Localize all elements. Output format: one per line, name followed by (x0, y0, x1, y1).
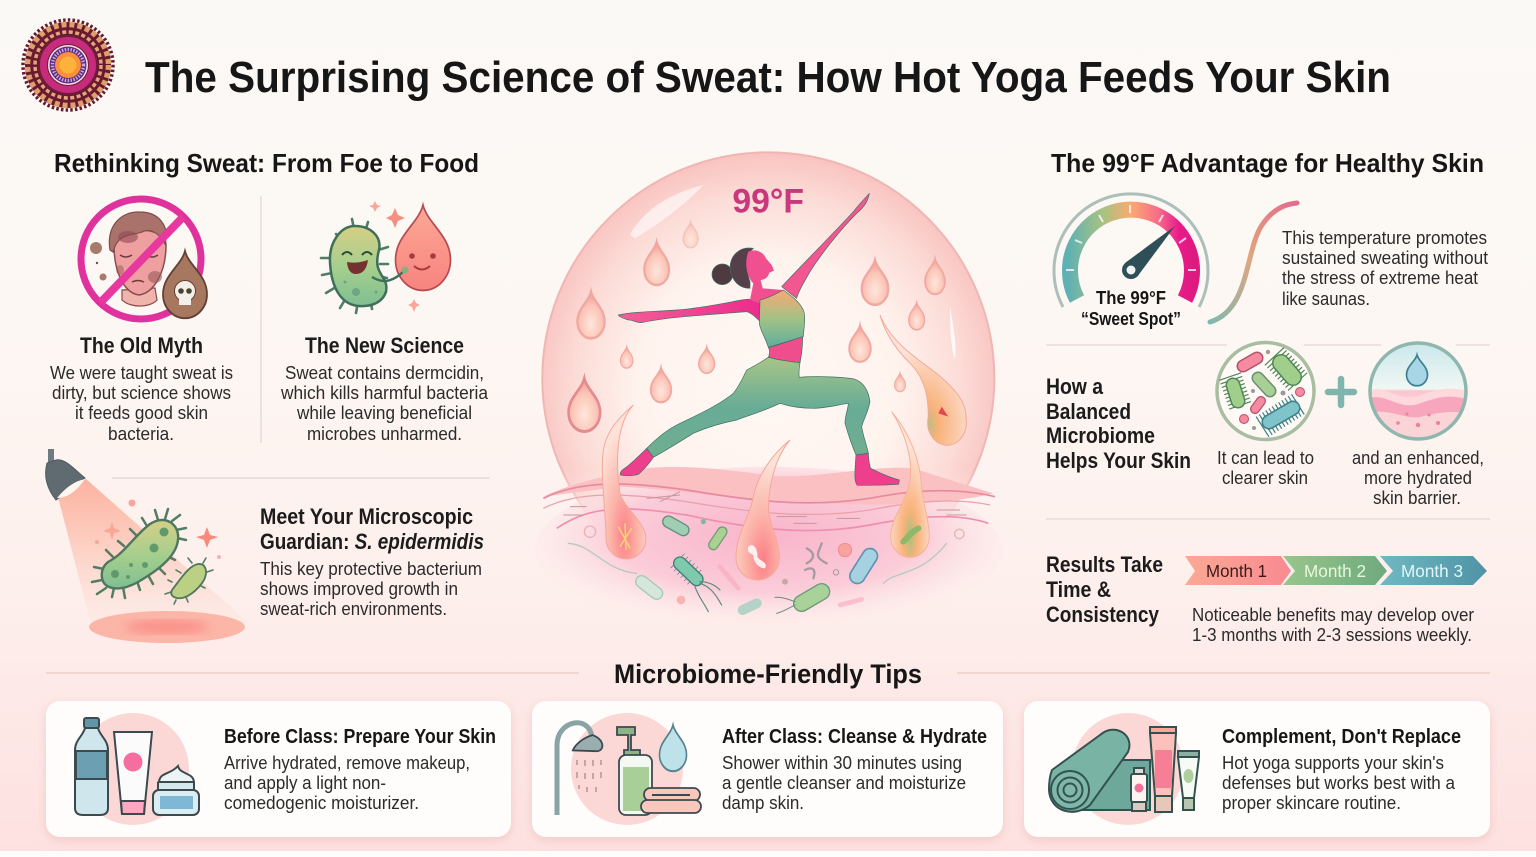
icon: new science, happy bacterium and sweat drop (321, 201, 450, 313)
heading: rethinking sweat: Rethinking Sweat: From Foe to Food (54, 148, 479, 178)
text: complement: Complement, Don't Replace (1222, 725, 1461, 748)
heading: results: Results Take (1046, 552, 1163, 577)
title: The Surprising Science of Sweat: How Hot Yoga Feeds Your Skin (145, 53, 1391, 102)
icon: skin barrier circle (1370, 343, 1468, 445)
text: meet your microscopic guardian: This key protective bacterium (260, 559, 482, 579)
text: the new science: microbes unharmed. (307, 424, 462, 444)
text: complement (1222, 725, 1461, 813)
text: before class (224, 725, 496, 813)
text: temperature: This temperature promotes (1282, 228, 1487, 248)
text: after class (722, 725, 987, 813)
text: meet your microscopic guardian: shows improved growth in (260, 579, 458, 599)
text: the old myth: We were taught sweat is (50, 363, 233, 383)
gauge: The 99°F (1096, 288, 1166, 308)
text: after class: Shower within 30 minutes using (722, 753, 962, 773)
text: results: Noticeable benefits may develop over (1192, 605, 1474, 625)
timeline chevrons: Month 2 (1304, 561, 1366, 581)
text: temperature: like saunas. (1282, 289, 1370, 309)
heading: results: Consistency (1046, 602, 1159, 627)
connector curve (1210, 203, 1297, 322)
front arm (618, 299, 766, 327)
skin layers with microbes (535, 467, 1002, 633)
text: before class: and apply a light non- (224, 773, 386, 793)
icon: shower, pump bottle, drop and towel (557, 723, 701, 815)
sweat drops (568, 222, 945, 432)
text: the old myth: The Old Myth (80, 333, 203, 358)
heading: balanced microbiome: Helps Your Skin (1046, 448, 1191, 473)
icon: bottle, tube and jar (75, 718, 199, 815)
timeline chevrons: Month 1 (1206, 561, 1267, 581)
gauge (1054, 194, 1208, 329)
card: after class (532, 701, 1003, 837)
text: the new science: which kills harmful bacteria (280, 383, 489, 403)
timeline chevrons (1185, 556, 1487, 585)
text: the old myth: bacteria. (108, 424, 174, 444)
text: the old myth (50, 333, 233, 444)
icon: yoga mat and skincare (1049, 727, 1199, 812)
text: meet your microscopic guardian: Meet Your Microscopic (260, 504, 473, 529)
caption: clearer skin: clearer skin (1222, 468, 1308, 488)
heading: balanced microbiome (1046, 374, 1191, 473)
midriff (768, 337, 803, 363)
text: complement: proper skincare routine. (1222, 793, 1401, 813)
heading: balanced microbiome: Balanced (1046, 399, 1131, 424)
heading: balanced microbiome: Microbiome (1046, 423, 1155, 448)
panel: microbiome friendly tips (46, 659, 1490, 837)
text: after class: damp skin. (722, 793, 804, 813)
text: the new science: The New Science (305, 333, 464, 358)
text: results: 1-3 months with 2-3 sessions weekly. (1192, 625, 1472, 645)
text: the new science (280, 333, 489, 444)
caption: clearer skin (1217, 448, 1314, 488)
temperature label: 99°F (732, 183, 804, 221)
heading: tips: Microbiome-Friendly Tips (614, 659, 922, 689)
feet (620, 448, 653, 476)
logo: mandala (23, 20, 113, 110)
text: temperature: the stress of extreme heat (1282, 268, 1478, 288)
icon: old myth, crossed out face with skull drop (81, 199, 207, 319)
text: before class: comedogenic moisturizer. (224, 793, 419, 813)
caption: skin barrier: more hydrated (1364, 468, 1472, 488)
icon: spotlight on S. epidermidis (46, 449, 248, 643)
text: meet your microscopic guardian: Guardian: S. epidermidis (260, 529, 484, 554)
yoga figure (618, 193, 899, 485)
text: the new science: while leaving beneficial (296, 403, 472, 423)
bubble (541, 151, 996, 514)
caption: skin barrier (1352, 448, 1484, 508)
icon: microbiome circle (1217, 342, 1314, 440)
card: complement (1024, 701, 1490, 837)
microbes (568, 522, 947, 613)
text: temperature: sustained sweating without (1282, 248, 1488, 268)
central illustration: yoga figure in a sweat bubble (535, 152, 1002, 633)
text: the old myth: dirty, but science shows (52, 383, 231, 403)
caption: clearer skin: It can lead to (1217, 448, 1314, 468)
text: results (1192, 605, 1474, 645)
text: the new science: Sweat contains dermcidin, (285, 363, 484, 383)
leggings (647, 357, 870, 457)
icon: plus (1328, 379, 1354, 405)
text: meet your microscopic guardian: sweat-rich environments. (260, 599, 447, 619)
heading: results (1046, 552, 1163, 627)
caption: skin barrier: and an enhanced, (1352, 448, 1484, 468)
panel: rethinking sweat (46, 148, 490, 643)
top (759, 290, 805, 347)
heading: 99F advantage: The 99°F Advantage for Healthy Skin (1051, 148, 1484, 178)
text: meet your microscopic guardian (260, 504, 484, 619)
text: after class: After Class: Cleanse & Hydrate (722, 725, 987, 748)
text: complement: Hot yoga supports your skin's (1222, 753, 1444, 773)
text: before class: Before Class: Prepare Your Skin (224, 725, 496, 748)
text: temperature (1282, 228, 1488, 309)
caption: skin barrier: skin barrier. (1373, 488, 1461, 508)
text: complement: defenses but works best with a (1222, 773, 1456, 793)
text: before class: Arrive hydrated, remove makeup, (224, 753, 470, 773)
heading: balanced microbiome: How a (1046, 374, 1103, 399)
card: before class (46, 701, 511, 837)
back arm (782, 193, 869, 298)
neck and head (712, 264, 733, 285)
heading: results: Time & (1046, 577, 1111, 602)
text: the old myth: it feeds good skin (75, 403, 208, 423)
timeline chevrons: Month 3 (1401, 561, 1463, 581)
gauge: “Sweet Spot” (1081, 309, 1181, 329)
panel: the 99F advantage (1046, 148, 1490, 645)
text: after class: a gentle cleanser and moisturize (722, 773, 966, 793)
follicle drops (602, 315, 966, 580)
